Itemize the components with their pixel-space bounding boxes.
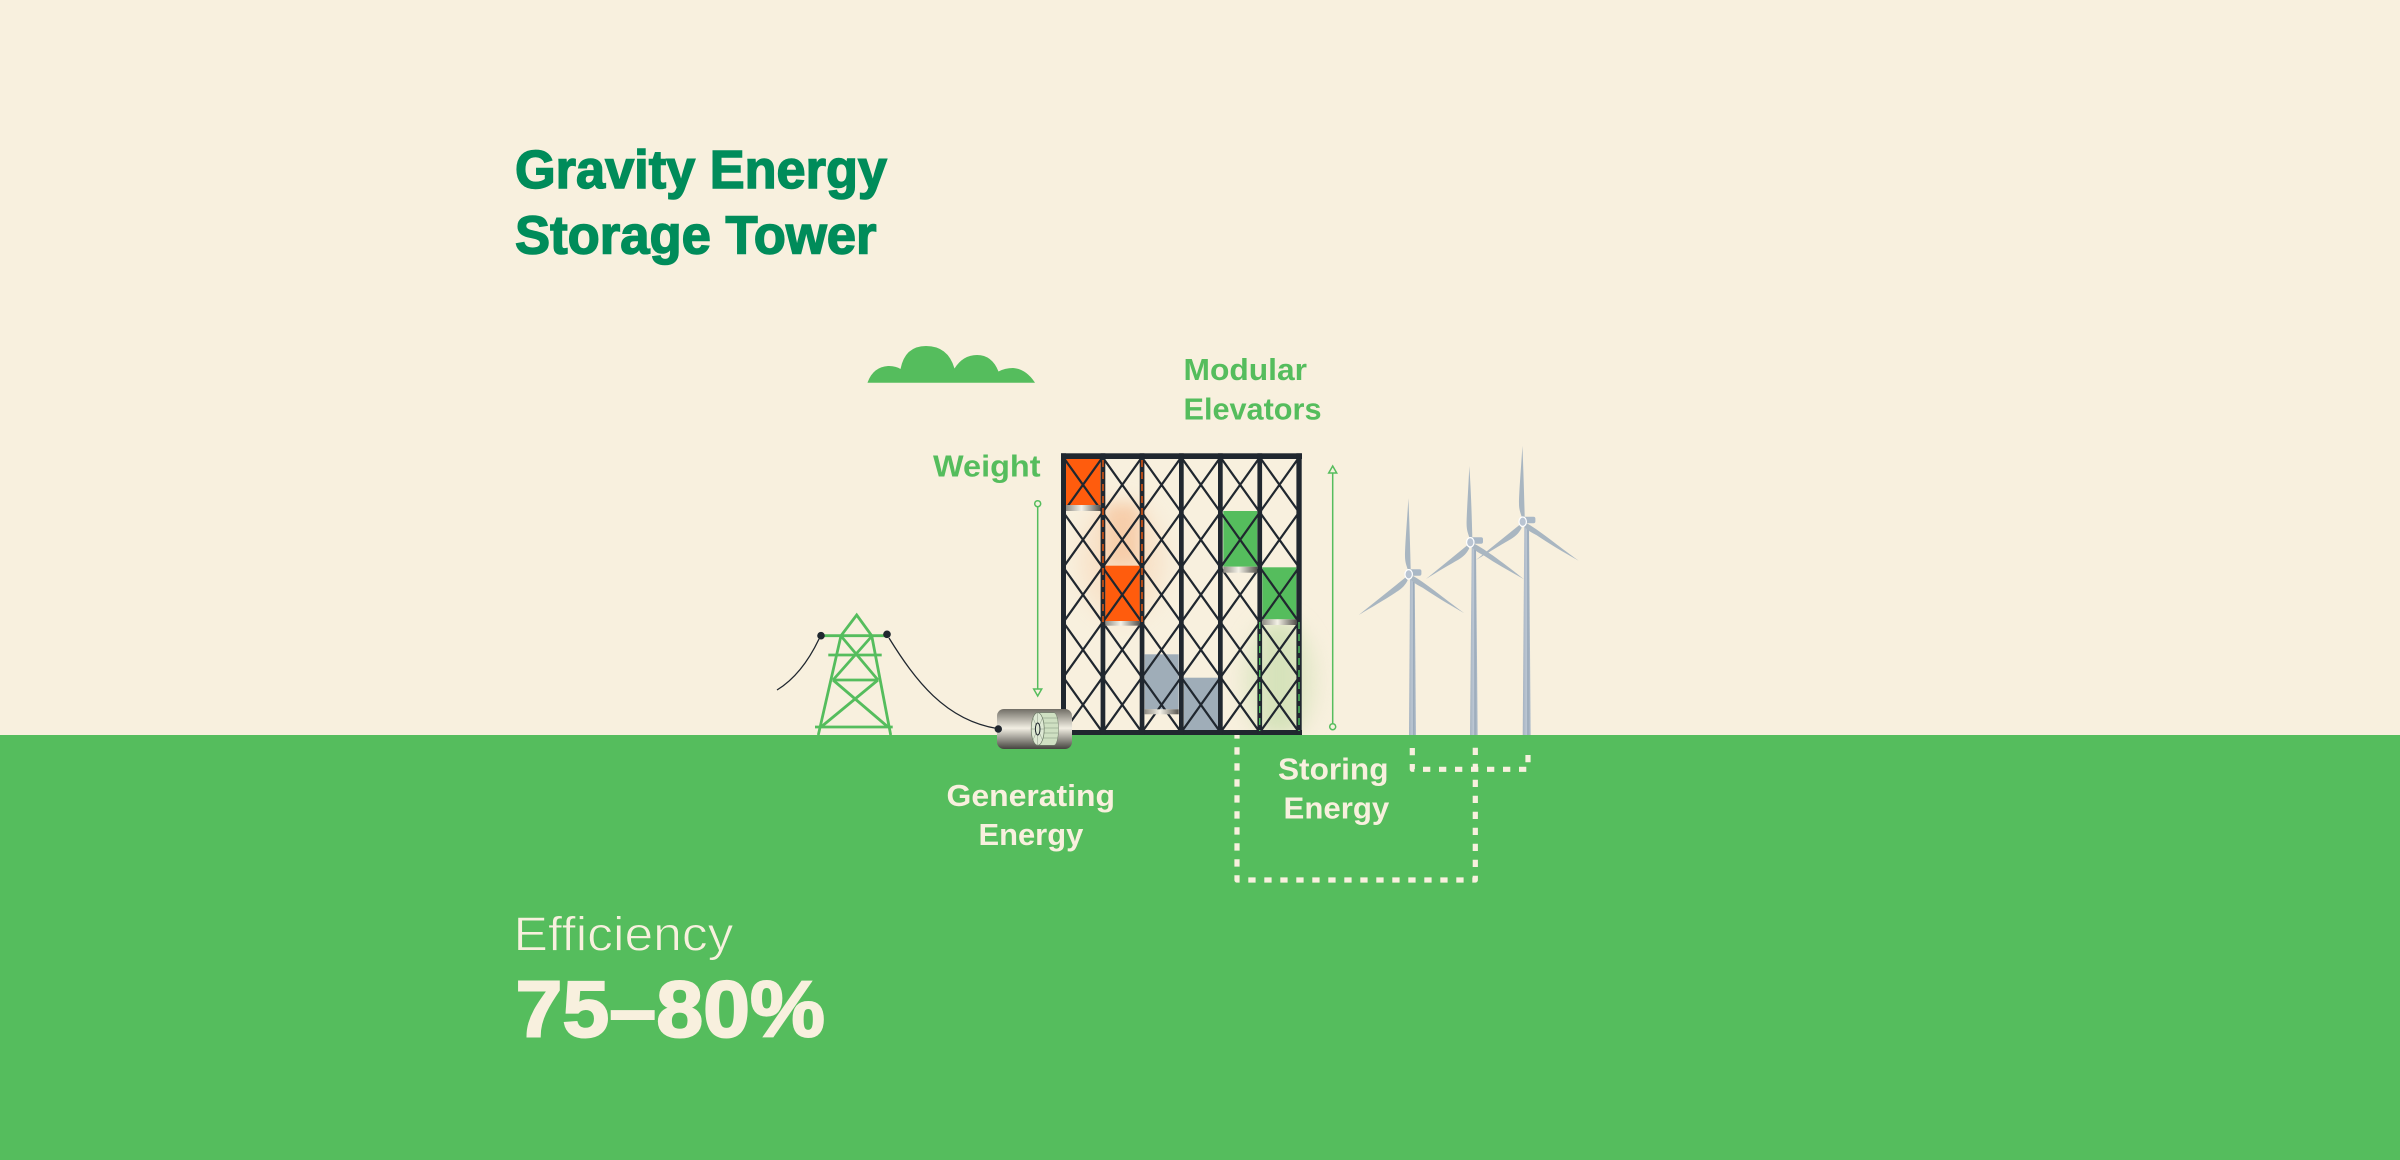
ground panel <box>0 735 2400 1160</box>
dotted power line: tower to turbines <box>1237 735 1528 880</box>
title: Gravity Energy <box>515 141 887 200</box>
title <box>515 141 887 265</box>
tower frame <box>1061 453 1302 735</box>
green elevator guide dashes <box>1260 622 1299 731</box>
arrow: weight descending <box>1034 501 1042 696</box>
transmission wires <box>777 638 997 728</box>
label: weight: Weight <box>933 449 1040 484</box>
label: generating energy <box>946 778 1115 852</box>
lattice bracing <box>1063 457 1299 732</box>
efficiency value: 75–80% <box>516 964 825 1054</box>
label: storing energy: Energy <box>1284 791 1390 826</box>
label: modular elevators <box>1184 352 1322 426</box>
background sky <box>0 0 2400 735</box>
icon: transmission pylon <box>815 615 893 735</box>
label: modular elevators: Elevators <box>1184 391 1322 426</box>
efficiency label: Efficiency <box>514 909 734 962</box>
green weight blocks <box>1223 511 1296 619</box>
title: Storage Tower <box>515 206 877 265</box>
icon: cloud <box>868 346 1035 383</box>
icon: wind turbine 3 <box>1476 446 1579 735</box>
icon: wind turbine 2 <box>1426 466 1524 735</box>
icon: wind turbine 1 <box>1359 498 1464 735</box>
tower <box>1061 453 1315 740</box>
pylon wire insulators <box>817 630 891 640</box>
arrow: modular elevators rising <box>1329 466 1337 730</box>
label: storing energy: Storing <box>1278 751 1388 786</box>
weight cables strips <box>1066 505 1296 714</box>
label: generating energy: Energy <box>978 817 1084 852</box>
tower glow: orange weight motion <box>1080 500 1164 620</box>
orange elevator guide dashes <box>1103 460 1142 622</box>
label: generating energy: Generating <box>946 778 1115 813</box>
tower glow: green weight motion <box>1243 620 1315 740</box>
label: storing energy <box>1278 751 1390 826</box>
orange weight blocks <box>1066 459 1140 621</box>
grey weight blocks <box>1145 654 1218 730</box>
icon: generator <box>995 709 1072 749</box>
label: modular elevators: Modular <box>1184 352 1307 387</box>
